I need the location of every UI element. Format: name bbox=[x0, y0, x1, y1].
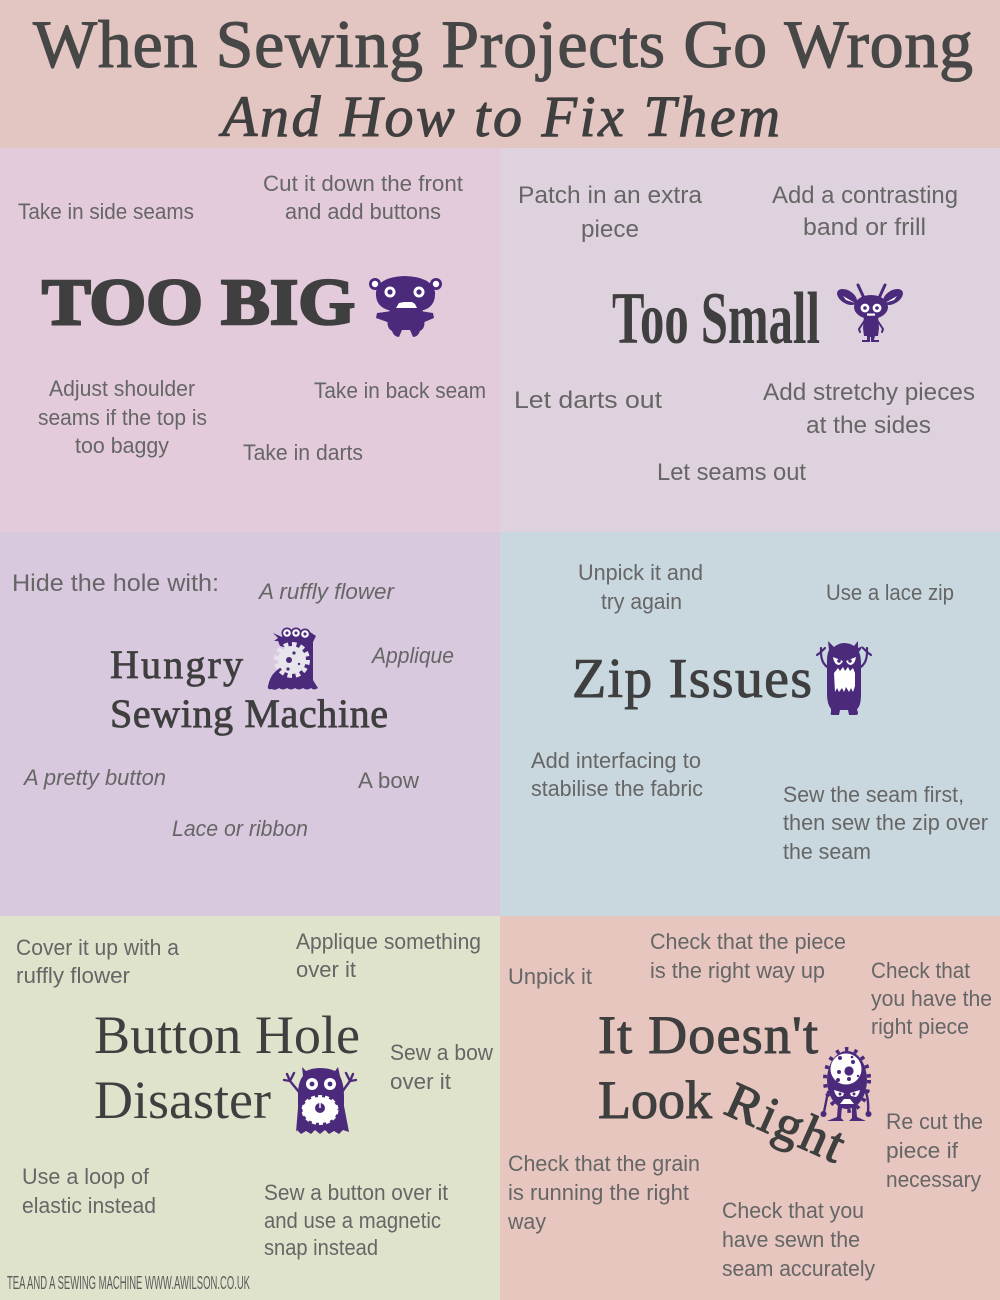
icon: long-eared monster bbox=[834, 285, 906, 342]
tip: seam accuracy: seam accurately bbox=[722, 1256, 875, 1281]
tip: back seam: Take in back seam bbox=[314, 378, 486, 403]
tip: applique over it: Applique something bbox=[296, 929, 481, 954]
tip: unpick and retry: Unpick it and bbox=[578, 560, 703, 585]
tip: grain bbox=[507, 1151, 700, 1234]
tip: extra piece: Patch in an extra bbox=[518, 182, 703, 209]
tip: applique over it: over it bbox=[296, 957, 356, 982]
tip: seam accuracy: have sewn the bbox=[722, 1227, 860, 1252]
header panel bbox=[0, 0, 1000, 149]
tip: extra piece: piece bbox=[581, 216, 639, 243]
icon: toothy monster bbox=[817, 641, 871, 715]
tip: pretty button: A pretty button bbox=[22, 765, 166, 790]
tip: hide the hole: Hide the hole with: bbox=[12, 570, 219, 597]
tip: sew seam first: then sew the zip over bbox=[783, 810, 988, 835]
tip: applique over it bbox=[296, 929, 481, 982]
tip: shoulder seams bbox=[38, 376, 207, 458]
tip: right piece: you have the bbox=[871, 986, 992, 1011]
heading: it doesn't look right: Look bbox=[598, 1070, 712, 1130]
icon: button hole monster bbox=[284, 1067, 356, 1134]
panel: it doesn't look right bbox=[500, 916, 1000, 1300]
tip: sew a bow bbox=[390, 1040, 493, 1094]
tip: re cut: piece if bbox=[886, 1138, 959, 1163]
tip: side seams: Take in side seams bbox=[18, 199, 194, 224]
tip: extra piece bbox=[518, 182, 703, 243]
panel: hungry sewing machine bbox=[0, 532, 500, 916]
tip: contrasting band: band or frill bbox=[803, 214, 926, 241]
tip: button and magnetic snap: and use a magnetic bbox=[264, 1208, 441, 1233]
tip: darts out: Let darts out bbox=[514, 387, 662, 414]
heading: hungry sewing machine: Sewing Machine bbox=[110, 691, 388, 736]
heading: too small: Too Small bbox=[612, 278, 820, 360]
tip: lace zip: Use a lace zip bbox=[826, 580, 954, 605]
heading: button hole disaster: Disaster bbox=[94, 1070, 271, 1130]
heading: zip issues: Zip Issues bbox=[572, 648, 812, 710]
tip: loop of elastic: elastic instead bbox=[22, 1193, 156, 1218]
tip: re cut: necessary bbox=[886, 1167, 981, 1192]
heading: button hole disaster: Button Hole bbox=[94, 1005, 360, 1065]
tip: right piece: Check that bbox=[871, 958, 970, 983]
icon: spotted monster bbox=[820, 1049, 872, 1121]
tip: loop of elastic: Use a loop of bbox=[22, 1164, 150, 1189]
tip: sew a bow: Sew a bow bbox=[390, 1040, 493, 1065]
heading: it doesn't look right bbox=[598, 1005, 854, 1175]
tip: grain: Check that the grain bbox=[508, 1151, 700, 1176]
tip: unpick and retry: try again bbox=[601, 589, 682, 614]
tip: cut down the front bbox=[263, 171, 463, 224]
tip: right piece: right piece bbox=[871, 1014, 969, 1039]
tip: cut down the front: Cut it down the front bbox=[263, 171, 463, 196]
subtitle: And How to Fix Them bbox=[218, 84, 780, 149]
heading: button hole disaster bbox=[94, 1005, 360, 1130]
tip: seam accuracy: Check that you bbox=[722, 1198, 864, 1223]
tip: shoulder seams: Adjust shoulder bbox=[49, 376, 195, 401]
panel: zip issues bbox=[500, 532, 1000, 916]
tip: ruffly flower cover: ruffly flower bbox=[16, 963, 130, 988]
tip: sew seam first bbox=[783, 782, 988, 864]
tip: seam accuracy bbox=[722, 1198, 875, 1281]
tip: lace or ribbon: Lace or ribbon bbox=[172, 816, 308, 841]
tip: right way up bbox=[650, 929, 846, 983]
tip: ruffly flower cover: Cover it up with a bbox=[16, 935, 180, 960]
heading: hungry sewing machine bbox=[110, 642, 388, 736]
panel: button hole disaster bbox=[0, 916, 500, 1300]
tip: stretchy pieces: Add stretchy pieces bbox=[763, 379, 975, 406]
tip: right piece bbox=[871, 958, 992, 1039]
heading: hungry sewing machine: Hungry bbox=[110, 642, 243, 687]
tip: grain: is running the right bbox=[508, 1180, 689, 1205]
tip: shoulder seams: seams if the top is bbox=[38, 405, 207, 430]
panel: too small bbox=[500, 148, 1000, 532]
tip: re cut: Re cut the bbox=[886, 1109, 983, 1134]
tip: loop of elastic bbox=[22, 1164, 156, 1218]
tip: button and magnetic snap: snap instead bbox=[264, 1235, 378, 1260]
tip: interfacing: Add interfacing to bbox=[531, 748, 701, 773]
tip: sew seam first: Sew the seam first, bbox=[783, 782, 964, 807]
tip: applique: Applique bbox=[370, 643, 454, 668]
tip: sew seam first: the seam bbox=[783, 839, 871, 864]
tip: right way up: is the right way up bbox=[650, 958, 825, 983]
tip: interfacing: stabilise the fabric bbox=[531, 776, 703, 801]
tip: bow: A bow bbox=[358, 768, 419, 793]
tip: seams out: Let seams out bbox=[657, 459, 806, 486]
footer credit: TEA AND A SEWING MACHINE WWW.AWILSON.CO.UK bbox=[7, 1273, 250, 1293]
tip: ruffly flower cover bbox=[16, 935, 180, 988]
tip: contrasting band: Add a contrasting bbox=[772, 182, 958, 209]
tip: darts: Take in darts bbox=[243, 440, 363, 465]
tip: button and magnetic snap bbox=[264, 1180, 448, 1260]
icon: sewing machine monster bbox=[268, 628, 318, 690]
tip: unpick and retry bbox=[578, 560, 703, 614]
panel: too big bbox=[0, 148, 500, 532]
heading: too big: TOO BIG bbox=[42, 266, 355, 339]
heading: it doesn't look right: Right bbox=[717, 1072, 854, 1175]
heading: it doesn't look right: It Doesn't bbox=[598, 1005, 818, 1065]
tip: right way up: Check that the piece bbox=[650, 929, 846, 954]
tip: re cut bbox=[886, 1109, 983, 1192]
tip: sew a bow: over it bbox=[390, 1069, 451, 1094]
tip: ruffly flower: A ruffly flower bbox=[257, 579, 396, 604]
tip: button and magnetic snap: Sew a button over it bbox=[264, 1180, 448, 1205]
tip: shoulder seams: too baggy bbox=[75, 433, 169, 458]
tip: interfacing bbox=[531, 748, 703, 801]
tip: stretchy pieces: at the sides bbox=[806, 412, 931, 439]
title: When Sewing Projects Go Wrong bbox=[33, 6, 973, 82]
tip: grain: way bbox=[507, 1209, 546, 1234]
tip: cut down the front: and add buttons bbox=[285, 199, 441, 224]
tip: contrasting band bbox=[772, 182, 958, 241]
tip: stretchy pieces bbox=[763, 379, 975, 439]
tip: unpick: Unpick it bbox=[508, 964, 592, 989]
icon: bear monster bbox=[369, 276, 442, 337]
